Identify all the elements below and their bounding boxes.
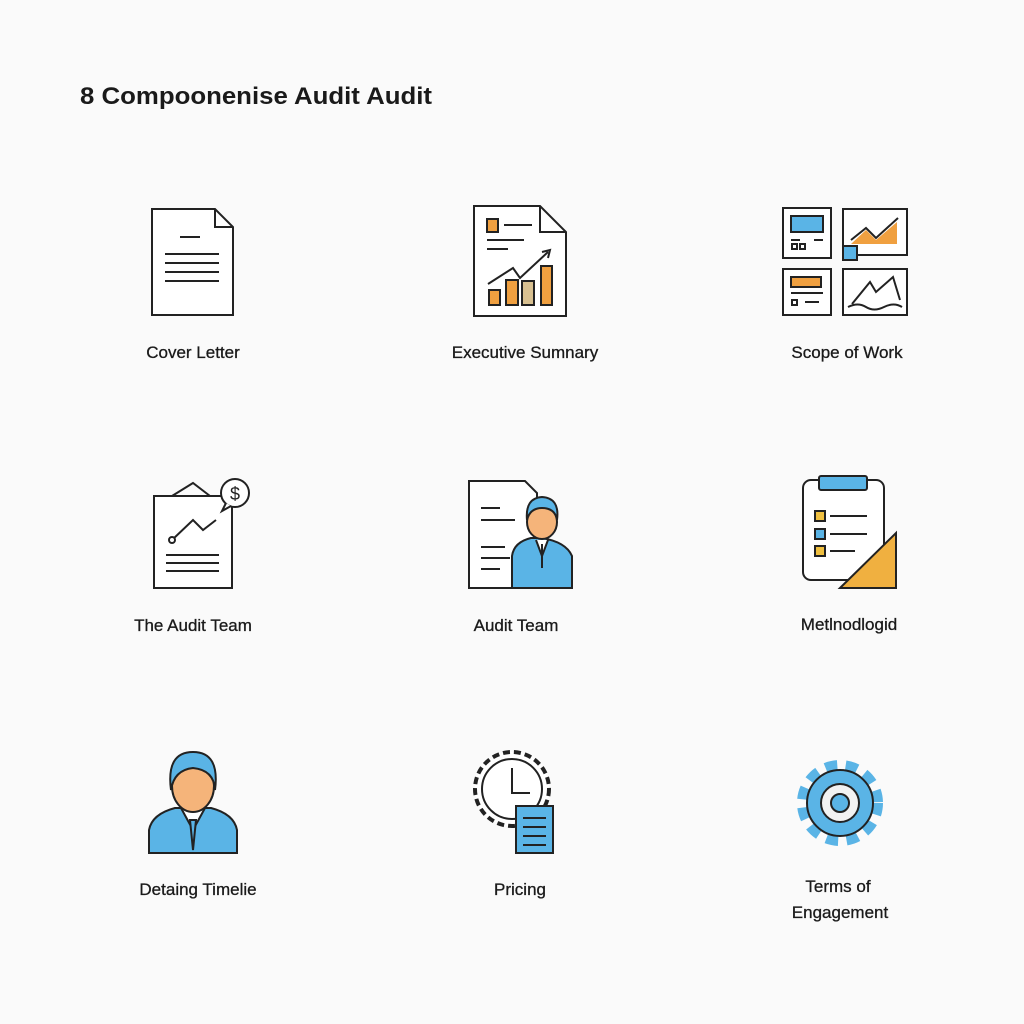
label: executive summary: Executive Sumnary [452,343,599,362]
label: scope of work: Scope of Work [791,343,903,362]
label: pricing: Pricing [494,880,546,899]
label: detaing timeline: Detaing Timelie [139,880,257,899]
icon: gear [802,765,878,841]
label: terms of engagement: Engagement [792,903,888,922]
icon: scope of work [783,208,907,315]
icon: financial doc [154,479,249,588]
icon: methodology [803,476,896,588]
label: audit team: Audit Team [474,616,558,635]
icon: financial doc: $ [230,484,240,504]
icon: audit team [469,481,572,588]
icon: pricing gear clock [475,752,553,853]
icon: executive summary [474,206,566,316]
label: terms of engagement: Terms of [805,877,871,896]
label: cover letter: Cover Letter [146,343,240,362]
label: methodology: Metlnodlogid [801,615,897,634]
icon: person [149,752,237,853]
label: the audit team: The Audit Team [134,616,252,635]
icon: cover letter [152,209,233,315]
title: 8 Compoonenise Audit Audit [80,83,432,110]
